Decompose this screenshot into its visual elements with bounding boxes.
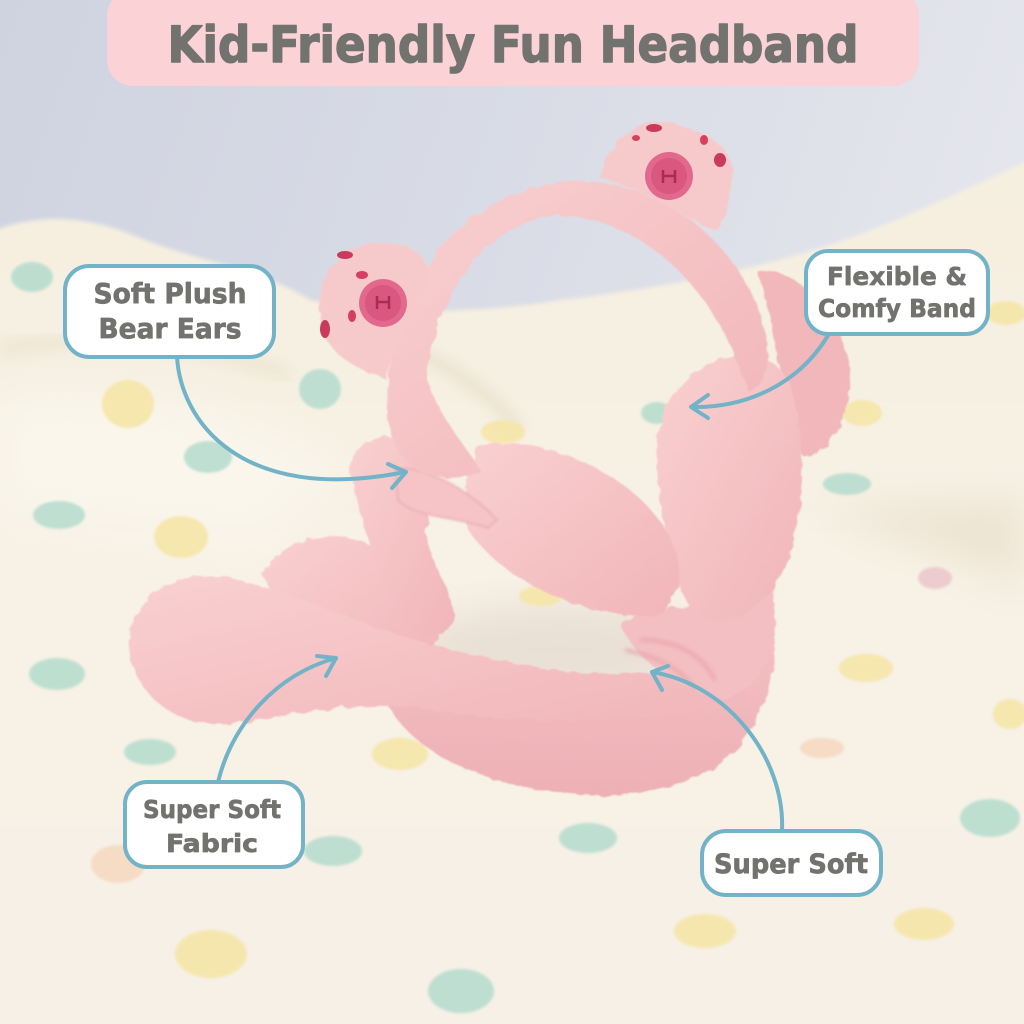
arrow: super soft fabric	[218, 656, 336, 782]
callout: flexible and comfy band	[806, 251, 988, 334]
callout: soft plush bear ears: Bear Ears	[98, 312, 242, 345]
callout: flexible and comfy band: Flexible &	[827, 262, 967, 291]
callout: soft plush bear ears: Soft Plush	[94, 277, 246, 310]
bear ear left	[319, 243, 429, 378]
left arm and cup	[350, 437, 680, 636]
headband arch	[387, 181, 768, 478]
callout: super soft fabric: Fabric	[166, 829, 258, 858]
callout: super soft: Super Soft	[714, 849, 868, 880]
callout: soft plush bear ears	[65, 266, 274, 357]
arrow: soft plush bear ears	[177, 356, 406, 488]
callout: super soft fabric	[125, 782, 303, 867]
callout: super soft fabric: Super Soft	[143, 795, 281, 824]
arrow: super soft	[652, 666, 782, 830]
arrow: flexible and comfy band	[691, 332, 830, 418]
bear ear right	[600, 122, 733, 230]
title banner: Kid-Friendly Fun Headband	[168, 16, 858, 74]
callout: flexible and comfy band: Comfy Band	[818, 294, 976, 323]
callout: super soft	[702, 831, 881, 895]
rear ear muff	[758, 271, 850, 458]
long scarf straps	[128, 536, 775, 795]
plush bear headband	[128, 122, 850, 795]
right ear cup	[657, 356, 802, 621]
title banner	[107, 0, 919, 86]
